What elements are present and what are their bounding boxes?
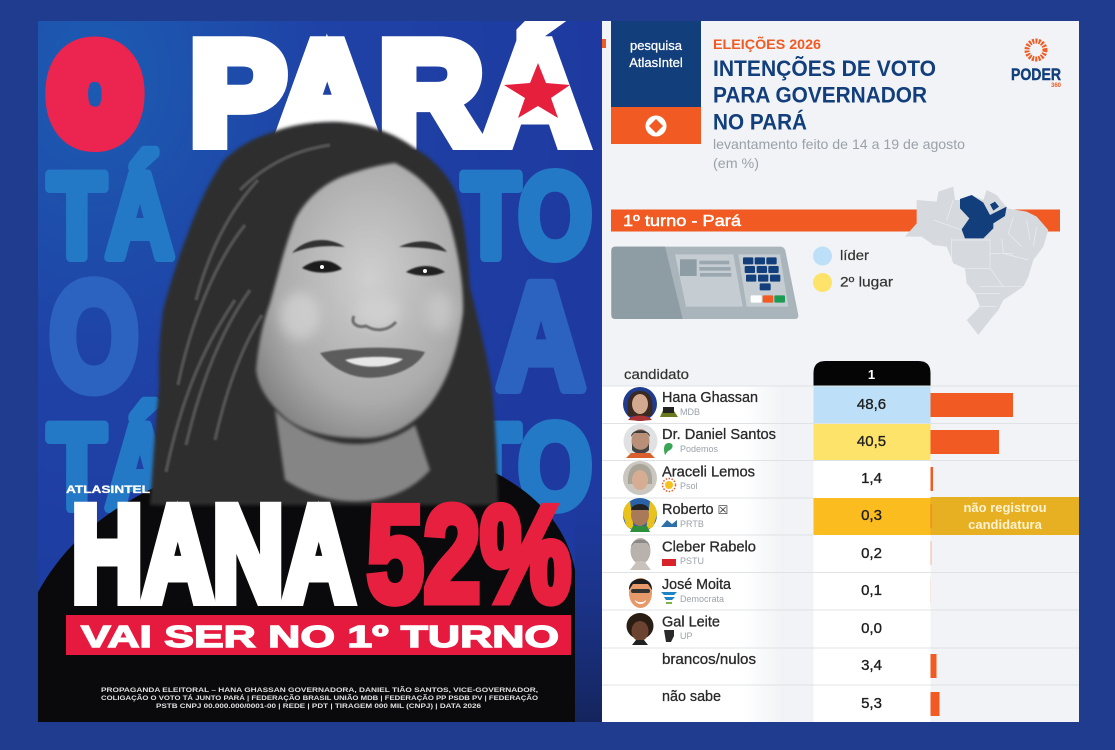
candidate names: Roberto ☒: [662, 502, 728, 518]
title block: INTENÇÕES DE VOTO: [713, 56, 936, 81]
face: [256, 163, 463, 438]
party names: PRTB: [680, 519, 704, 529]
values: [857, 396, 886, 712]
photo: Cleber Rabelo: [630, 538, 651, 570]
party names: PSTU: [680, 556, 704, 566]
candidate names: Cleber Rabelo: [662, 540, 756, 556]
legend: 2º lugar: [840, 274, 893, 290]
logo: Poder360: 360: [1051, 83, 1062, 89]
icon: voting machine: [611, 247, 798, 319]
dark clothing: [38, 470, 575, 722]
background repeated words: TO: [462, 149, 592, 283]
candidate names: Hana Ghassan: [662, 390, 758, 406]
background repeated words: [48, 149, 592, 534]
party names: Democrata: [680, 594, 724, 604]
photo: Roberto: [623, 498, 657, 532]
background repeated words: TÁ: [48, 400, 174, 534]
party logos: [660, 407, 678, 642]
background repeated words: TÁ: [48, 149, 174, 283]
legend: líder: [840, 247, 869, 263]
table backgrounds: [602, 386, 784, 722]
section bar: 1º turno - Pará: [611, 210, 1060, 232]
background repeated words: TO: [462, 400, 592, 534]
legend: [813, 246, 893, 292]
background repeated words: O: [50, 252, 138, 420]
table header: candidato: [624, 367, 689, 382]
nose: [362, 302, 398, 326]
title block: [713, 35, 965, 171]
headline: O PARÁ: [45, 21, 594, 152]
party names: UP: [680, 631, 693, 641]
background repeated words: A: [497, 252, 585, 420]
section bar: 1º turno - Pará: 1º turno - Pará: [623, 213, 741, 230]
hair: [150, 122, 498, 505]
values: 0,0: [861, 620, 882, 637]
photo: Hana Ghassan: [623, 387, 657, 421]
table header: [624, 361, 930, 386]
badge: pesquisa AtlasIntel: pesquisa: [630, 38, 683, 53]
title block: levantamento feito de 14 a 19 de agosto: [713, 136, 965, 152]
banner: vai ser no 1º turno: VAI SER NO 1º TURNO: [81, 619, 559, 654]
icon: red star: [504, 63, 570, 118]
callout: não registrou candidatura: candidatura: [968, 517, 1043, 532]
candidate names: José Moita: [662, 577, 732, 593]
party names: Podemos: [680, 444, 719, 454]
values: 0,2: [861, 545, 882, 562]
eyes: [302, 261, 342, 273]
table header: 1: [868, 367, 875, 382]
decorative mark: [602, 39, 606, 48]
mouth: [320, 348, 425, 378]
callout: não registrou candidatura: não registrou: [963, 500, 1047, 515]
photo: José Moita: [629, 578, 652, 608]
values: 1,4: [861, 470, 882, 487]
headline: HANA 52%: 52%: [367, 478, 571, 630]
panel: poll infographic: [602, 21, 1079, 722]
party names: Psol: [680, 481, 698, 491]
bars: [930, 393, 1013, 716]
legal disclaimer text: PROPAGANDA ELEITORAL – HANA GHASSAN GOVERNADORA, DANIEL TIÃO SANTOS, VICE-GOVERNADOR,: [101, 687, 538, 694]
values: 3,4: [861, 657, 882, 674]
title block: (em %): [713, 155, 759, 171]
headline: O PARÁ: O: [55, 29, 135, 161]
headline: O PARÁ: PARÁ: [190, 12, 587, 174]
cheek highlights: [280, 292, 320, 340]
candidate names: brancos/nulos: [662, 652, 756, 668]
title block: PARA GOVERNADOR: [713, 82, 927, 108]
eyebrows: [292, 240, 447, 253]
candidate names: Araceli Lemos: [662, 464, 755, 480]
headline: HANA 52%: HANA: [72, 480, 354, 629]
headline: HANA 52%: [74, 500, 572, 607]
candidate photos: [623, 387, 658, 645]
values: 0,3: [861, 507, 882, 524]
badge: pesquisa AtlasIntel: [611, 21, 701, 144]
legal disclaimer text: [101, 687, 538, 710]
map of Brazil with Pará highlighted: [905, 187, 1048, 335]
brand: ATLASINTEL: ATLASINTEL: [66, 484, 150, 496]
portrait of Hana Ghassan: [38, 122, 602, 722]
values: 48,6: [857, 396, 886, 413]
neck: [275, 410, 430, 501]
candidate names: não sabe: [662, 689, 721, 705]
party names: [680, 407, 724, 641]
values: 40,5: [857, 433, 886, 450]
candidate names: Gal Leite: [662, 614, 720, 630]
hair strands: [166, 145, 330, 472]
title block: NO PARÁ: [713, 110, 807, 134]
legal disclaimer text: COLIGAÇÃO O VOTO TÁ JUNTO PARÁ | FEDERAÇÃO BRASIL UNIÃO MDB | FEDERAÇÃO PP PSDB PV | FEDERAÇÃO: [101, 695, 538, 702]
photo: Daniel Santos: [624, 424, 658, 458]
values: 5,3: [861, 695, 882, 712]
banner: vai ser no 1º turno: [66, 615, 571, 655]
values: 0,1: [861, 582, 882, 599]
logo: Poder360: PODER: [1011, 65, 1061, 84]
callout: não registrou candidatura: [963, 500, 1047, 532]
title block: ELEIÇÕES 2026: [713, 35, 821, 52]
party names: MDB: [680, 407, 700, 417]
highlighted cells: [814, 386, 930, 423]
photo: Araceli Lemos: [623, 461, 657, 495]
candidate names: [662, 390, 776, 705]
legal disclaimer text: PSTB CNPJ 00.000.000/0001-00 | REDE | PDT | TIRAGEM 000 MIL (CNPJ) | DATA 2026: [156, 704, 482, 710]
candidate names: Dr. Daniel Santos: [662, 427, 776, 443]
logo: Poder360: [1011, 41, 1062, 89]
badge: pesquisa AtlasIntel: AtlasIntel: [629, 55, 683, 70]
photo: Gal Leite: [626, 613, 654, 645]
panel: campaign poster: [38, 12, 602, 722]
table: [602, 361, 1079, 722]
